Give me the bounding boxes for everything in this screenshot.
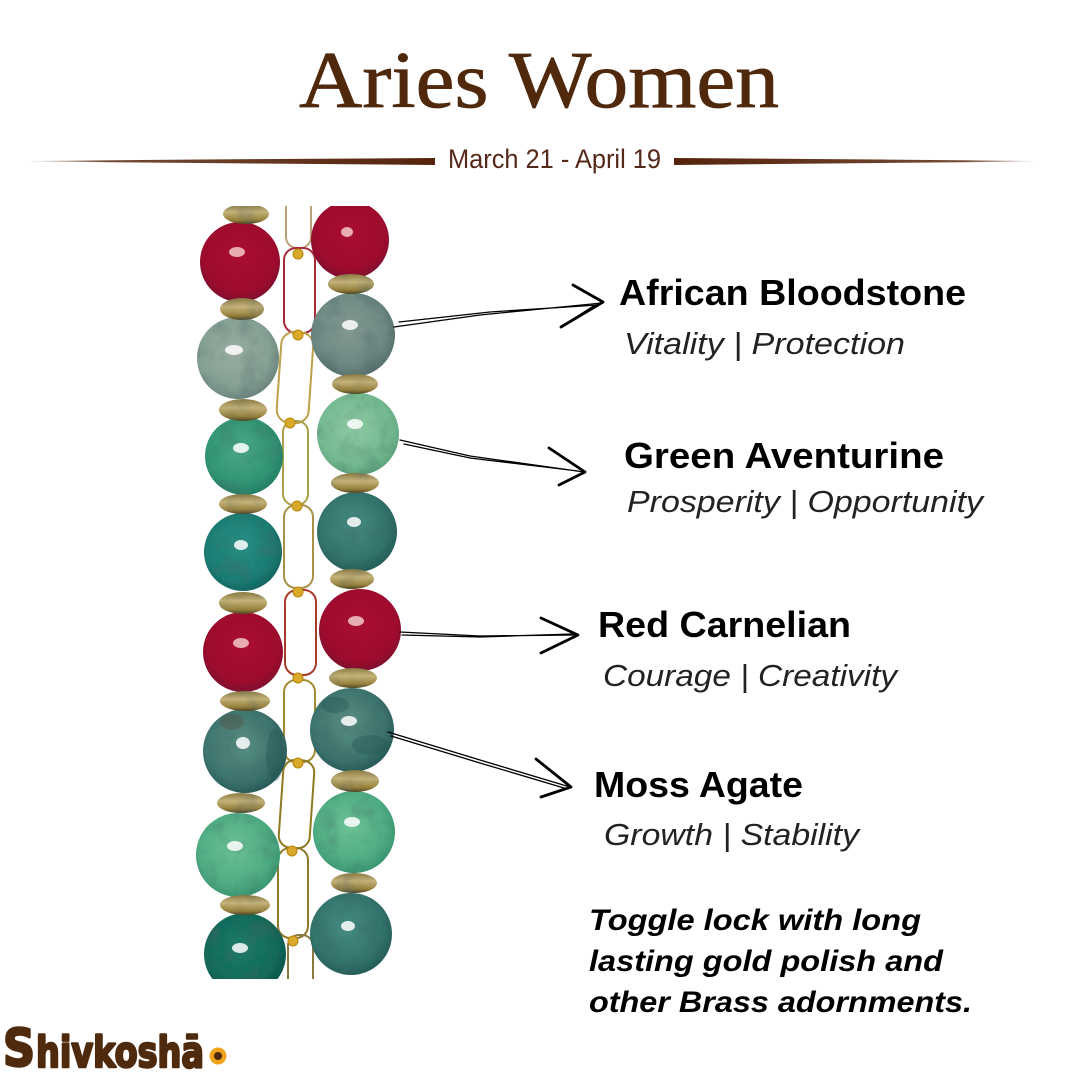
arrow: African Bloodstone bbox=[394, 285, 603, 327]
label: Red Carnelian: Courage | Creativity bbox=[603, 658, 900, 693]
label: Green Aventurine: Green Aventurine bbox=[624, 435, 944, 476]
label: Green Aventurine bbox=[624, 435, 986, 519]
bead bracelet photo bbox=[196, 190, 401, 1005]
date range: March 21 - April 19 bbox=[448, 144, 661, 174]
label: Red Carnelian bbox=[598, 604, 900, 693]
note: toggle lock bbox=[589, 904, 972, 1019]
arrow: Moss Agate bbox=[388, 732, 571, 797]
red beads bbox=[200, 201, 401, 692]
label: African Bloodstone: Vitality | Protection bbox=[624, 326, 905, 361]
gold chain bbox=[276, 190, 316, 1005]
note: toggle lock: other Brass adornments. bbox=[589, 986, 972, 1019]
right bead strand bbox=[310, 274, 399, 975]
title: Aries Women bbox=[299, 37, 779, 125]
label: African Bloodstone bbox=[619, 272, 966, 361]
label: Green Aventurine: Prosperity | Opportunity bbox=[627, 484, 986, 519]
logo: Shivkosha bbox=[3, 1019, 226, 1079]
moss mottling bbox=[220, 697, 388, 781]
label: Moss Agate: Growth | Stability bbox=[604, 817, 862, 852]
arrow: Red Carnelian bbox=[400, 618, 578, 653]
logo: Shivkosha: S bbox=[3, 1019, 35, 1079]
note: toggle lock: lasting gold polish and bbox=[589, 945, 944, 978]
label: Moss Agate bbox=[594, 764, 862, 852]
icon: sunflower bbox=[210, 1048, 226, 1064]
arrow: Green Aventurine bbox=[400, 440, 585, 485]
label: Red Carnelian: Red Carnelian bbox=[598, 604, 851, 645]
logo: Shivkosha: hivkoshā bbox=[36, 1028, 204, 1078]
bead highlights bbox=[225, 227, 364, 953]
label: African Bloodstone: African Bloodstone bbox=[619, 272, 966, 313]
note: toggle lock: Toggle lock with long bbox=[589, 904, 921, 937]
left bead strand bbox=[196, 204, 287, 995]
date divider bbox=[25, 144, 1038, 174]
label: Moss Agate: Moss Agate bbox=[594, 764, 803, 805]
